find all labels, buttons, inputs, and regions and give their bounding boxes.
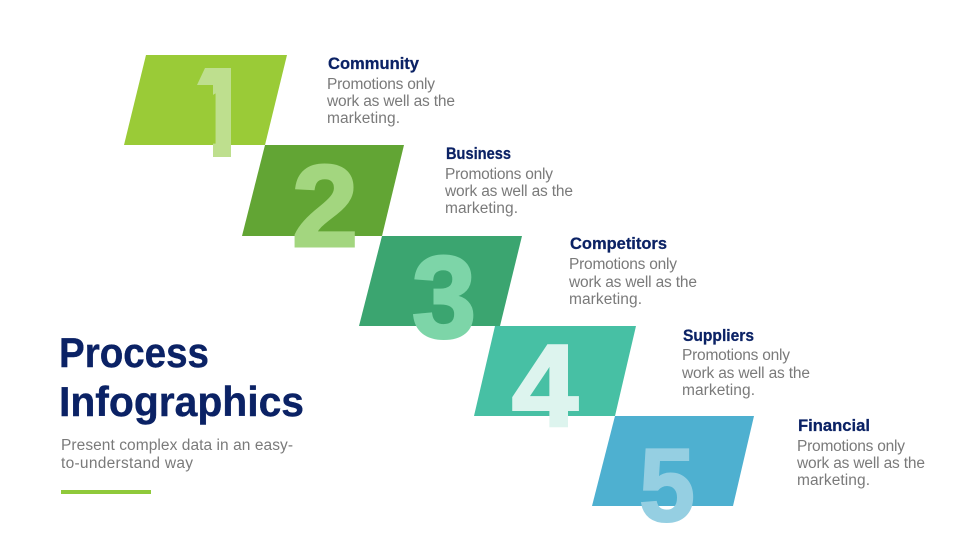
step 5 text: Financial: [798, 416, 870, 435]
step 2 text: Business: [446, 144, 511, 163]
step 5 shape and number: [592, 416, 754, 544]
step 2 text: Promotions only: [445, 166, 553, 183]
step 3 text: [568, 234, 697, 308]
step 4 text: marketing.: [682, 382, 755, 399]
step 1 text: marketing.: [327, 110, 400, 127]
title: Process: [59, 329, 209, 376]
step 2 shape and number: [242, 141, 404, 271]
step 2 text: marketing.: [445, 200, 518, 217]
step 2 text: work as well as the: [444, 183, 573, 200]
title: Infographics: [59, 378, 304, 425]
step 4 text: Suppliers: [683, 326, 754, 345]
step 3 text: marketing.: [569, 291, 642, 308]
step 1 text: [326, 54, 455, 127]
step 4 shape and number: 4: [512, 321, 578, 451]
step 3 shape and number: 3: [412, 232, 476, 362]
step 4 text: [681, 326, 810, 399]
step 3 text: Promotions only: [569, 256, 677, 273]
subtitle: Present complex data in an easy-: [61, 437, 293, 454]
subtitle: to-understand way: [61, 455, 193, 472]
step 5 text: work as well as the: [796, 455, 925, 472]
step 3 shape and number: [359, 232, 522, 362]
step 4 shape and number: [474, 321, 636, 451]
step 3 text: work as well as the: [568, 274, 697, 291]
subtitle: [61, 437, 293, 472]
step 4 text: work as well as the: [681, 365, 810, 382]
step 2 shape and number: 2: [292, 141, 358, 271]
accent bar: [61, 490, 151, 494]
step 5 text: [796, 416, 925, 489]
step 1 text: Promotions only: [327, 76, 435, 93]
step 1 shape and number: [124, 55, 287, 157]
title: [59, 329, 304, 425]
step 5 shape and number: 5: [639, 428, 695, 544]
step 4 text: Promotions only: [682, 347, 790, 364]
step 3 text: Competitors: [570, 234, 667, 253]
step 5 text: Promotions only: [797, 438, 905, 455]
step 5 text: marketing.: [797, 472, 870, 489]
step 1 text: Community: [328, 54, 420, 73]
step 1 shape and number: 1: [190, 52, 255, 182]
step 2 text: [444, 144, 573, 217]
step 1 text: work as well as the: [326, 93, 455, 110]
